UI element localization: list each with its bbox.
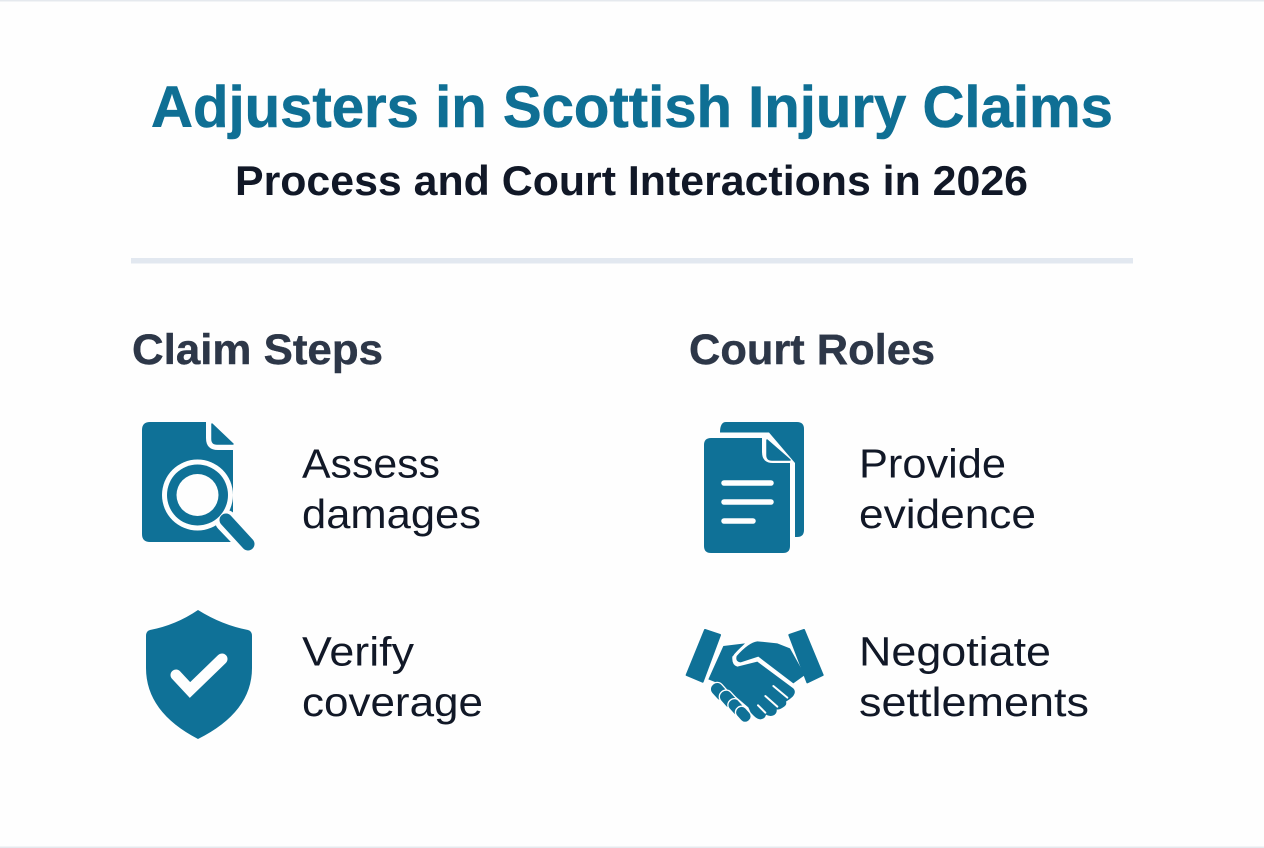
text: verify coverage: coverage: [302, 679, 483, 725]
text: negotiate settlements: settlements: [859, 679, 1089, 725]
icon: shield with check mark: [146, 610, 252, 739]
panel: claim steps: [132, 327, 483, 739]
icon: document with magnifying glass: [142, 422, 248, 544]
text: negotiate settlements: [859, 628, 1089, 725]
heading: court roles: Court Roles: [689, 327, 935, 374]
text: provide evidence: Provide: [859, 440, 1006, 486]
text: assess damages: Assess: [302, 440, 440, 486]
text: verify coverage: [302, 628, 483, 725]
title: Adjusters in Scottish Injury Claims: [151, 75, 1113, 140]
text: assess damages: damages: [302, 491, 481, 537]
text: assess damages: [302, 440, 481, 537]
heading: claim steps: Claim Steps: [132, 327, 383, 374]
text: provide evidence: [859, 440, 1036, 537]
text: provide evidence: evidence: [859, 491, 1036, 537]
text: negotiate settlements: Negotiate: [859, 628, 1051, 674]
icon: handshake: [687, 630, 823, 724]
icon: stacked documents: [704, 422, 804, 553]
panel: court roles: [687, 327, 1089, 725]
subtitle: Process and Court Interactions in 2026: [235, 157, 1028, 204]
text: verify coverage: Verify: [302, 628, 415, 674]
